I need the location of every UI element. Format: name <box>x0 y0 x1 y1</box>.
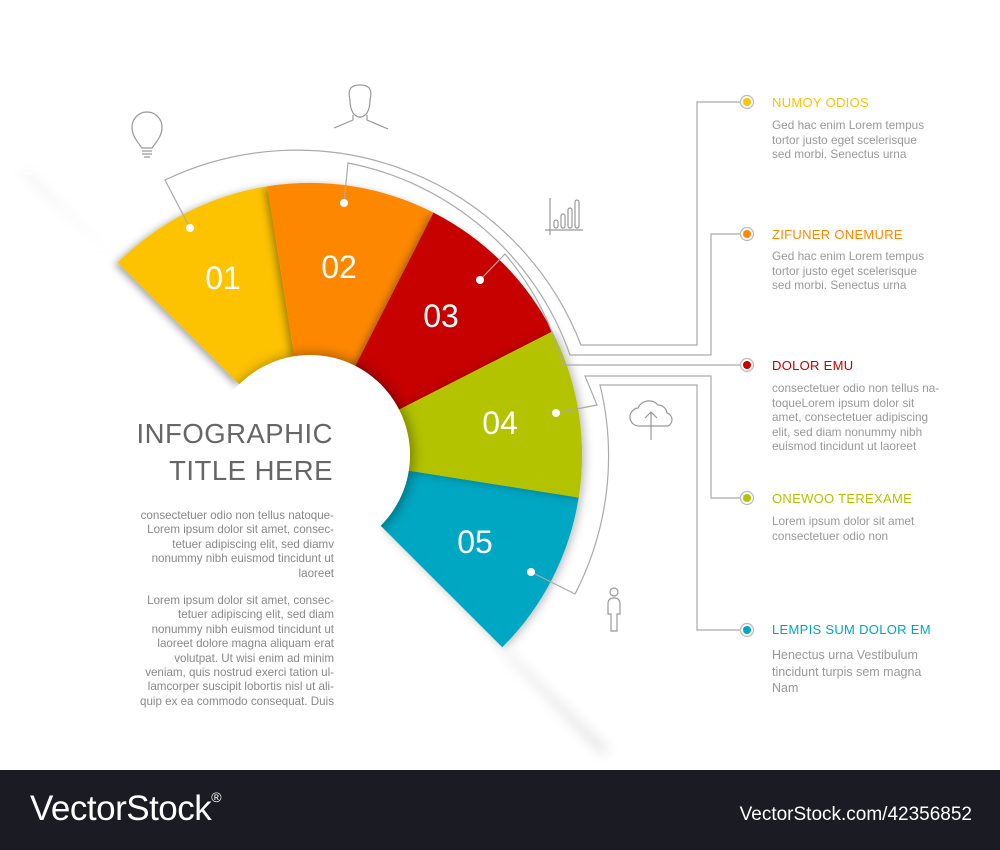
item 1 <box>772 95 924 161</box>
text: sed morbi. Senectus urna <box>772 278 906 292</box>
diagonal shadow <box>20 170 610 752</box>
icon: lightbulb <box>132 112 162 157</box>
left text block 2: veniam, quis nostrud exerci tation ul- <box>145 666 334 679</box>
left text block 1: Lorem ipsum dolor sit amet, consec- <box>147 523 334 536</box>
main diagram <box>112 84 754 754</box>
item 3 <box>772 358 939 453</box>
segment 03 <box>355 213 552 410</box>
footer: VectorStock® <box>30 789 221 828</box>
segment dots <box>186 199 560 576</box>
text: DOLOR EMU <box>772 358 853 373</box>
left text block 1: laoreet <box>299 567 334 580</box>
left text block 2: quip ex ea commodo consequat. Duis <box>140 695 334 708</box>
inner circle <box>210 355 410 555</box>
text: amet, consectetuer adipiscing <box>772 410 928 424</box>
text: Lorem ipsum dolor sit amet <box>772 514 914 528</box>
text: elit, sed diam nonummy nibh <box>772 424 922 438</box>
item 4 <box>772 491 914 542</box>
text: consectetuer odio non tellus na- <box>772 381 939 395</box>
left text block 1 <box>141 509 334 580</box>
segment 05 <box>381 471 579 647</box>
text: ONEWOO TEREXAME <box>772 491 912 506</box>
segment numbers: 05 <box>457 524 493 560</box>
inner circle shadow <box>234 346 420 532</box>
footer: VectorStock.com/42356852 <box>740 804 972 825</box>
text: Nam <box>772 681 798 695</box>
right dots <box>740 96 754 636</box>
item 2 <box>772 227 924 292</box>
left text block 2: Lorem ipsum dolor sit amet, consec- <box>147 594 334 607</box>
icon: bar chart <box>545 198 583 235</box>
segment numbers: 04 <box>482 405 518 441</box>
footer <box>0 770 1000 850</box>
icon: standing person <box>608 588 620 631</box>
left text block 2 <box>140 594 334 708</box>
left text block 1: consectetuer odio non tellus natoque- <box>141 509 334 522</box>
segment 02 <box>268 183 434 366</box>
left text block 2: nonummy nibh euismod tincidunt ut <box>152 623 334 636</box>
left text block 2: tetuer adipiscing elit, sed diam <box>178 608 334 621</box>
text: NUMOY ODIOS <box>772 95 869 110</box>
segment 04 <box>399 332 582 498</box>
text: sed morbi. Senectus urna <box>772 147 906 161</box>
left text block 2: volutpat. Ut wisi enim ad minim <box>174 652 334 665</box>
text: ZIFUNER ONEMURE <box>772 227 903 242</box>
text: consectetuer odio non <box>772 528 888 542</box>
title: INFOGRAPHIC <box>137 418 333 449</box>
segment numbers: 02 <box>321 249 357 285</box>
text: tortor justo eget scelerisque <box>772 264 917 278</box>
segment numbers <box>205 249 518 560</box>
left text block 2: laoreet dolore magna aliquam erat <box>157 637 334 650</box>
left text block 1: nonummy nibh euismod tincidunt ut <box>152 552 334 565</box>
text: Henectus urna Vestibulum <box>772 648 918 662</box>
icon: man head <box>334 85 388 129</box>
left text block 1: tetuer adipiscing elit, sed diamv <box>172 538 334 551</box>
text: Ged hac enim Lorem tempus <box>772 249 924 263</box>
text: toqueLorem ipsum dolor sit <box>772 396 914 410</box>
text: tortor justo eget scelerisque <box>772 132 917 146</box>
text: tincidunt turpis sem magna <box>772 664 921 678</box>
title <box>137 418 333 486</box>
segment numbers: 01 <box>205 260 241 296</box>
text: euismod tincidunt ut laoreet <box>772 439 916 453</box>
segment 01 <box>118 186 294 384</box>
item 5 <box>772 622 931 695</box>
text: Ged hac enim Lorem tempus <box>772 118 924 132</box>
connector lines <box>165 102 741 630</box>
text: LEMPIS SUM DOLOR EM <box>772 622 931 637</box>
segment numbers: 03 <box>423 298 459 334</box>
icon: cloud upload <box>630 401 672 440</box>
title: TITLE HERE <box>169 455 333 486</box>
left text block 2: lamcorper suscipit lobortis nisl ut ali- <box>148 680 334 693</box>
